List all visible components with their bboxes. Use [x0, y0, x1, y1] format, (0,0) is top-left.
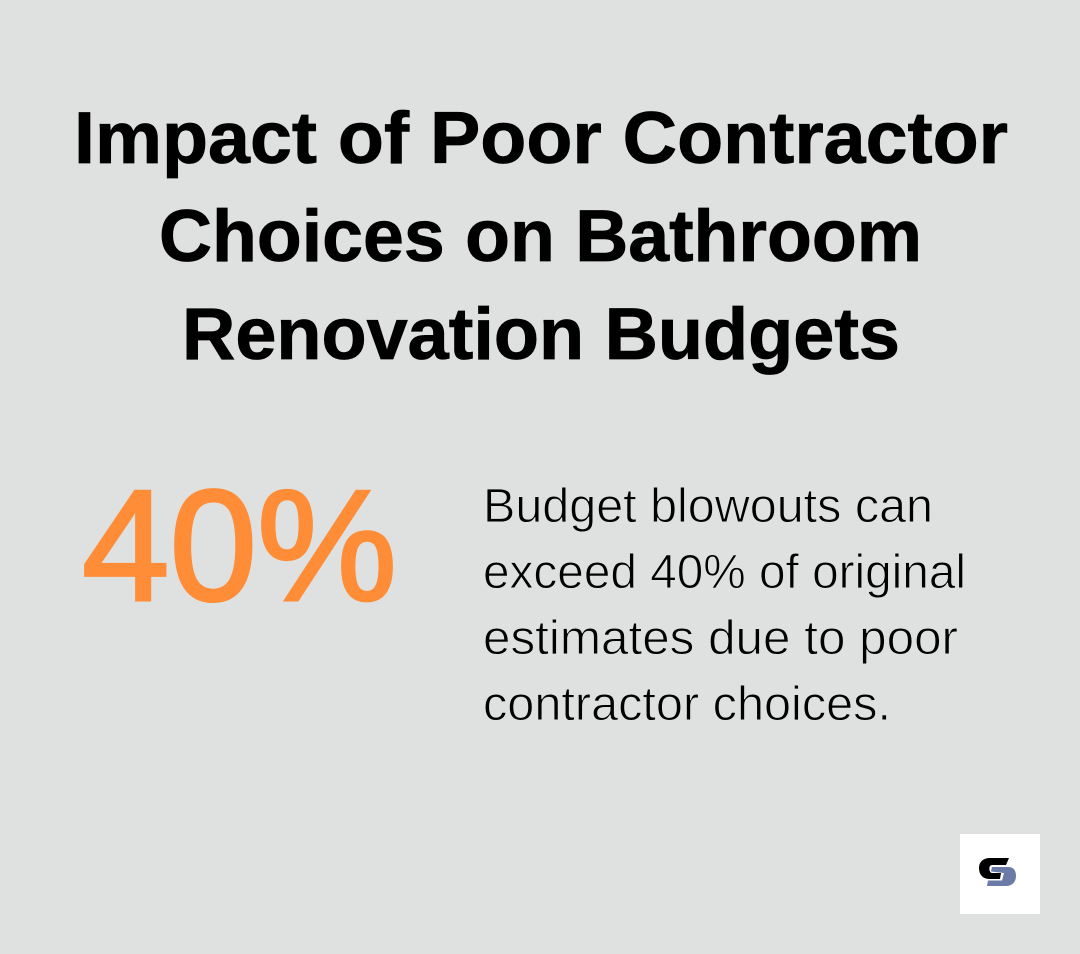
description text: exceed 40% of original — [483, 546, 966, 599]
big statistic: 40%: 40% — [82, 458, 397, 634]
title: Choices on Bathroom — [159, 196, 922, 277]
title — [74, 98, 1008, 375]
title: Renovation Budgets — [182, 294, 900, 375]
description text: Budget blowouts can — [483, 480, 933, 533]
description text: contractor choices. — [483, 678, 891, 731]
description text — [483, 480, 966, 731]
logo badge — [960, 834, 1040, 914]
logo mark: black upper stroke — [979, 858, 1009, 879]
description text: estimates due to poor — [483, 612, 958, 665]
title: Impact of Poor Contractor — [74, 98, 1008, 179]
logo mark: blue lower stroke — [987, 867, 1016, 886]
